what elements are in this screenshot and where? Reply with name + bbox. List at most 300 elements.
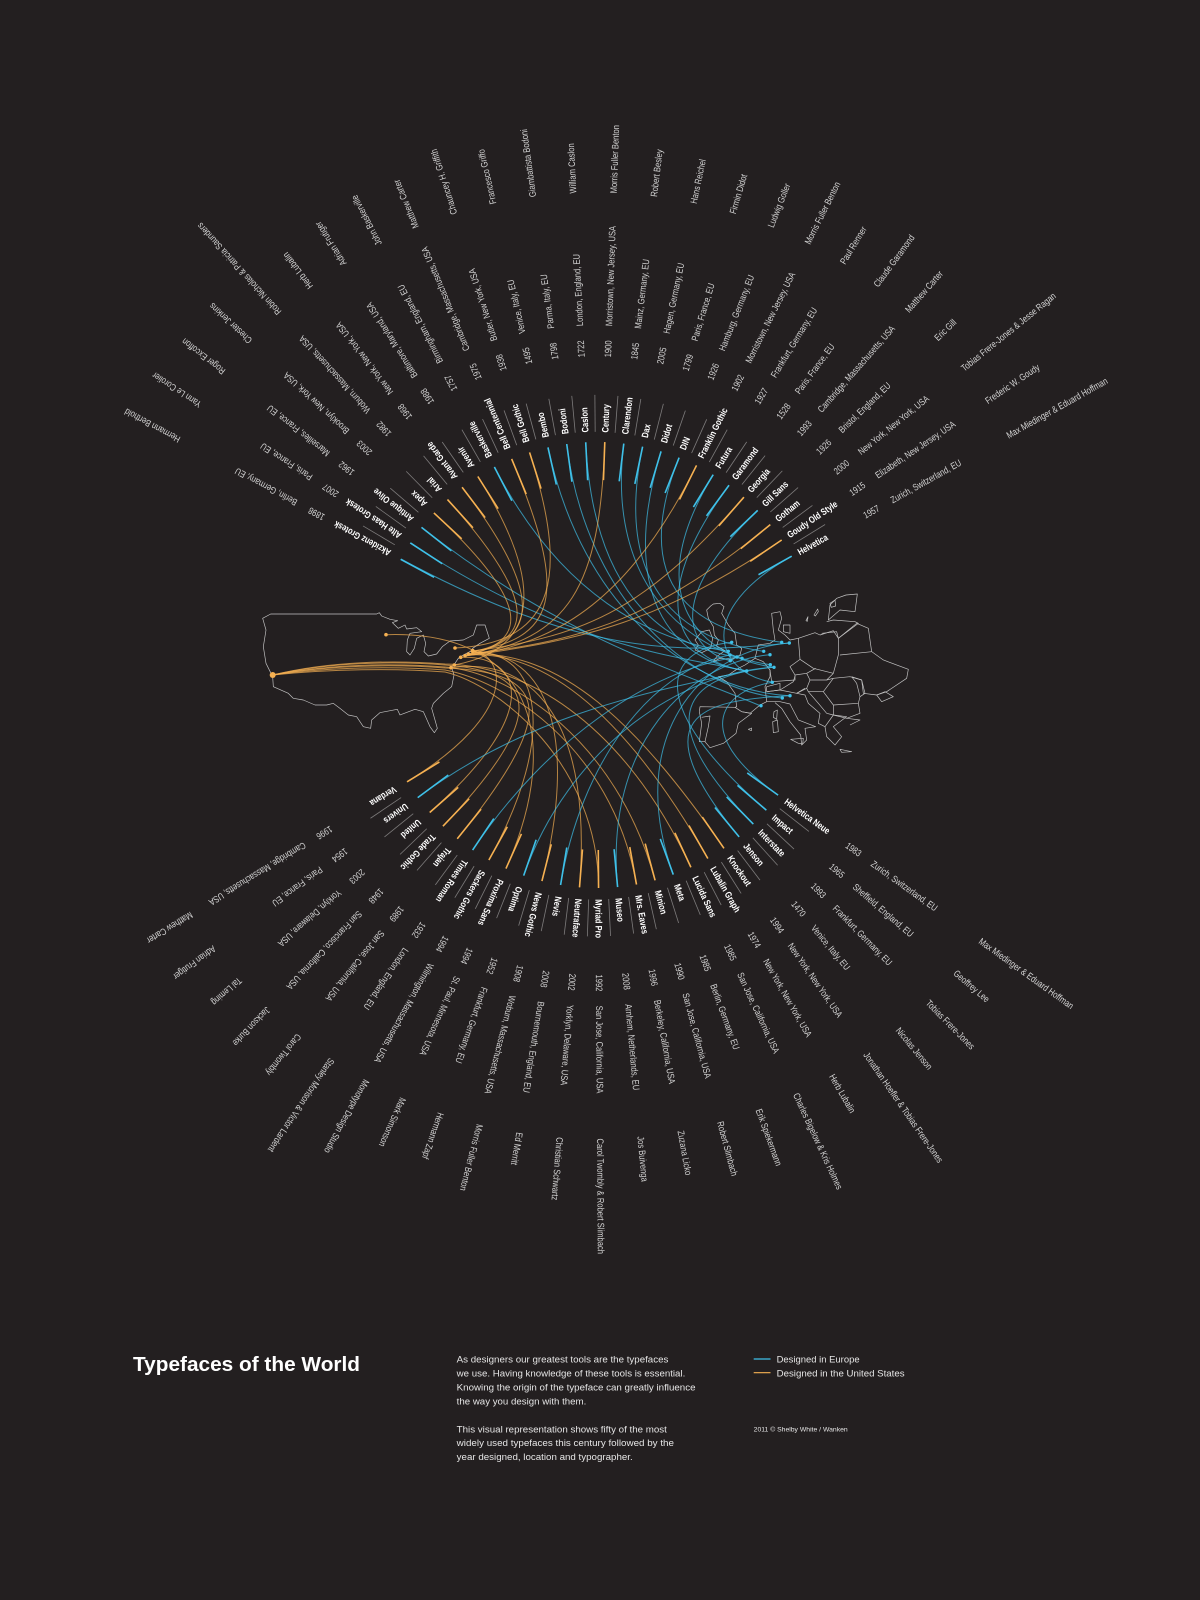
year: 1952 <box>484 956 500 976</box>
designer: Roger Excoffon <box>179 336 227 377</box>
year: 2003 <box>354 438 374 458</box>
year: 1470 <box>789 899 808 919</box>
year: 1989 <box>387 904 406 924</box>
location: San Jose, California, USA <box>323 928 387 1004</box>
curve: Apex to Brooklyn <box>434 513 511 655</box>
name: Bell Gothic <box>509 403 532 444</box>
location: Berkeley, California, USA <box>652 999 678 1085</box>
year: 1954 <box>330 846 350 865</box>
curve: Interstate to Frankfurt <box>689 667 774 824</box>
curve: Dax to Hagen <box>635 447 764 651</box>
spoke: Myriad Pro <box>587 899 607 1254</box>
curve: Neutraface to Yorklyn <box>451 666 582 887</box>
designer: Morris Fuller Benton <box>458 1123 485 1192</box>
curve: Antique Olive to Marseilles <box>422 527 761 706</box>
curve: Knockout to New York <box>468 654 724 848</box>
spoke: Dax <box>639 158 714 440</box>
name: Baskerville <box>466 419 494 460</box>
curve: Lubalin Graph to New York <box>468 655 708 859</box>
name: Lucida Sans <box>690 874 719 919</box>
designer: Matthew Carter <box>145 910 195 946</box>
curve: Bell Gothic to Butler <box>455 452 550 648</box>
spoke: Arial <box>195 217 448 495</box>
designer: Chauncey H. Griffith <box>428 147 459 216</box>
name: Century <box>600 404 612 433</box>
curve: Century to Morristown <box>464 442 605 656</box>
spoke: Interstate <box>752 827 977 1056</box>
curve: Bembo to Venice <box>548 447 790 696</box>
curve: Trade Gothic to San Francisco <box>273 663 519 826</box>
name: Dax <box>639 423 653 439</box>
year: 1965 <box>827 861 847 880</box>
name: Bodoni <box>556 408 571 435</box>
curve: Verdana to Cambridge <box>407 651 496 782</box>
name: United <box>399 817 423 841</box>
spoke: Akzidenz Grotesk <box>122 401 396 558</box>
name: Meta <box>672 882 688 903</box>
designer: Giambattista Bodoni <box>518 129 538 198</box>
curve: Gill Sans to Bristol <box>693 510 758 661</box>
location: New York, New York, USA <box>856 393 931 457</box>
location: Elizabeth, New Jersey, USA <box>873 418 958 481</box>
name: Knockout <box>725 853 754 888</box>
location: St. Paul, Minnesota, USA <box>417 975 463 1058</box>
curve: Avant Garde to New York <box>462 487 522 654</box>
spoke: Impact <box>766 812 992 1009</box>
designer: Charles Bigelow & Kris Holmes <box>791 1091 845 1191</box>
designer: Jos Buivenga <box>635 1136 650 1182</box>
designer: Jackson Burke <box>230 1005 273 1049</box>
connection curves <box>273 442 792 888</box>
location: Bournemouth, England, EU <box>521 1001 547 1094</box>
location: Frankfurt, Germany, EU <box>831 903 895 968</box>
year: 1993 <box>809 881 829 901</box>
year: 2007 <box>320 481 341 500</box>
curve: Sackers Gothic to Wilmington <box>472 652 533 860</box>
spoke: Verdana <box>145 784 399 946</box>
designer: Max Miedinger & Eduard Hoffman <box>1004 375 1110 441</box>
spoke: Century <box>600 125 627 433</box>
name: Helvetica Neue <box>782 796 832 836</box>
spoke: Nevis <box>503 895 564 1166</box>
spoke: Avenir <box>313 216 482 470</box>
spoke: Optima <box>414 883 525 1161</box>
designer: Tobias Frere-Jones <box>924 998 977 1052</box>
location: Venice, Italy, EU <box>505 279 528 335</box>
copyright: 2011 © Shelby White / Wanken <box>754 1425 848 1433</box>
description text: year designed, location and typographer. <box>457 1452 633 1463</box>
description text: As designers our greatest tools are the typefaces <box>457 1355 669 1366</box>
location: Brooklyn, New York, USA <box>281 370 351 436</box>
spoke: Futura <box>713 224 874 473</box>
spoke: Alte Haas Grotesk <box>150 365 407 541</box>
curve: Helvetica to Zurich <box>724 556 792 682</box>
location: Zurich, Switzerland, EU <box>869 858 940 913</box>
year: 1798 <box>547 342 561 360</box>
location: Parma, Italy, EU <box>538 274 556 329</box>
curve: Futura to Frankfurt <box>679 475 774 667</box>
curve: Garamond to Paris <box>678 485 747 671</box>
name: Bembo <box>535 411 551 439</box>
year: 1996 <box>314 824 335 842</box>
curve: Arial to Woburn <box>447 500 517 652</box>
name: Antique Olive <box>371 486 416 524</box>
name: Arial <box>424 475 444 495</box>
location: London, England, EU <box>571 254 585 326</box>
curve: Clarendon to Mainz <box>619 444 770 665</box>
designer: Christian Schwartz <box>549 1137 565 1201</box>
location: Arnhem, Netherlands, EU <box>623 1004 642 1091</box>
year: 1900 <box>602 340 614 357</box>
name: Myriad Pro <box>593 899 604 938</box>
spoke: Neutraface <box>543 898 584 1201</box>
location: Wilmington, Massachusetts, USA <box>372 961 436 1065</box>
name: Proxima Sans <box>476 878 506 928</box>
location: New York, New York, USA <box>761 957 814 1039</box>
location: Cambridge, Massachusetts, USA <box>207 840 308 908</box>
spoke: Bell Centennial <box>391 176 518 451</box>
year: 1927 <box>752 386 770 406</box>
designer: Robin Nicholas & Patricia Saunders <box>195 221 284 317</box>
spoke: Bodoni <box>518 128 577 435</box>
name: Interstate <box>756 827 788 859</box>
designer: Hermann Zapf <box>420 1111 446 1161</box>
location: San Jose, California, USA <box>735 971 782 1055</box>
curve: News Gothic to Woburn <box>471 652 557 881</box>
designer: William Caslon <box>565 143 579 194</box>
spoke: Georgia <box>745 268 950 499</box>
location: Yorklyn, Delaware, USA <box>276 887 344 949</box>
name: Sackers Gothic <box>451 868 488 922</box>
year: 1757 <box>442 373 460 393</box>
name: Neutraface <box>570 898 584 938</box>
location: Paris, France, EU <box>258 441 314 483</box>
year: 1898 <box>306 505 326 523</box>
spoke: Lucida Sans <box>685 874 845 1194</box>
year: 2005 <box>654 346 669 365</box>
radial labels <box>122 125 1110 1254</box>
spoke: Times Roman <box>260 854 470 1155</box>
designer: Claude Garamond <box>871 232 917 289</box>
designer: Tal Leming <box>209 975 244 1008</box>
name: Trade Gothic <box>398 832 438 873</box>
designer: Carol Twombly & Robert Slimbach <box>595 1138 607 1254</box>
designer: Adrian Frutiger <box>171 943 218 982</box>
location: Butler, New York, USA <box>466 267 499 343</box>
description text: we use. Having knowledge of these tools is essential. <box>456 1369 685 1380</box>
name: Didot <box>658 423 675 444</box>
spoke: Baskerville <box>349 190 500 460</box>
name: Helvetica <box>796 531 830 557</box>
designer: Morris Fuller Benton <box>608 125 621 194</box>
location: London, England, EU <box>361 946 411 1012</box>
curve: Optima to Frankfurt <box>524 667 774 876</box>
curve: Lucida Sans to San Jose <box>273 662 691 867</box>
spoke: Antique Olive <box>179 331 419 524</box>
spoke: Trajan <box>259 842 454 1078</box>
spoke: United <box>205 813 423 1008</box>
designer: Matthew Carter <box>391 178 421 230</box>
designer: Stanley Morison & Victor Lardent <box>265 1056 337 1155</box>
name: Avenir <box>455 444 477 470</box>
name: Futura <box>713 444 735 470</box>
year: 2000 <box>831 457 852 477</box>
designer: Chester Jenkins <box>207 301 254 346</box>
spoke: Proxima Sans <box>371 875 506 1149</box>
curve: Didot to Paris <box>645 451 747 671</box>
curve: Myriad Pro to San Jose <box>273 670 599 888</box>
spoke: Knockout <box>720 853 945 1168</box>
spoke: Helvetica Neue <box>779 796 1076 1016</box>
designer: Eric Gill <box>932 317 959 343</box>
year: 1974 <box>745 930 764 950</box>
curve: Univers to Paris <box>418 671 747 798</box>
spoke: Goudy Old Style <box>785 361 1045 545</box>
description text: widely used typefaces this century followed by the <box>456 1438 674 1449</box>
curve: Georgia to Cambridge <box>473 497 744 651</box>
curve: Bodoni to Parma <box>567 444 782 698</box>
curve: Avenir to Baltimore <box>454 476 524 665</box>
location: San Jose, California, USA <box>680 992 714 1080</box>
description text <box>456 1355 696 1463</box>
location: Berlin, Germany, EU <box>708 982 742 1051</box>
year: 1992 <box>594 974 605 992</box>
designer: Ed Merritt <box>509 1132 525 1166</box>
name: Trajan <box>431 845 453 870</box>
year: 1962 <box>336 459 356 478</box>
designer: Ludwig Goller <box>765 182 793 229</box>
location: Marseilles, France, EU <box>265 403 332 459</box>
name: Caslon <box>578 407 591 433</box>
curve: United to Yorklyn <box>430 657 511 812</box>
curve: Minion to San Jose <box>273 665 655 880</box>
curve: Proxima Sans to St. Paul <box>386 635 533 869</box>
year: 1948 <box>366 886 386 906</box>
location: Bristol, England, EU <box>836 380 893 435</box>
city dots: United States <box>270 633 475 678</box>
year: 1994 <box>433 934 451 954</box>
location: Morristown, New Jersey, USA <box>743 270 798 365</box>
location: Paris, France, EU <box>689 282 717 342</box>
location: Paris, France, EU <box>270 864 325 909</box>
location: Sheffield, England, EU <box>851 881 916 939</box>
location: San Jose, California, USA <box>594 1006 606 1094</box>
designer: Herb Lubalin <box>280 250 315 291</box>
spoke: Meta <box>666 882 784 1170</box>
designer: Robert Slimbach <box>715 1120 740 1177</box>
designer: Monotype Design Studio <box>322 1078 372 1155</box>
legend: United States: Designed in the United States <box>777 1368 905 1380</box>
location: Woburn, Massachusetts, USA <box>296 333 373 416</box>
name: Bell Centennial <box>482 397 513 451</box>
curve: Trajan to San Jose <box>273 666 529 839</box>
spoke: Franklin Gothic <box>695 180 848 463</box>
curve: Akzidenz Grotesk to Berlin <box>401 559 789 648</box>
spoke: Apex <box>207 296 433 509</box>
year: 1722 <box>575 340 587 358</box>
spoke: Mrs. Eaves <box>627 894 694 1177</box>
curve: Goudy Old Style to Elizabeth <box>465 540 782 656</box>
designer: Adrian Frutiger <box>313 219 349 268</box>
spoke: Helvetica <box>796 375 1110 557</box>
designer: John Baskerville <box>349 193 384 247</box>
designer: Hermann Berthold <box>122 406 182 445</box>
year: 1799 <box>680 353 695 372</box>
spoke: Bembo <box>475 147 557 439</box>
name: Minion <box>653 889 670 915</box>
description text: Knowing the origin of the typeface can greatly influence <box>457 1382 696 1394</box>
curve: Times Roman to London <box>473 657 737 850</box>
location: Baltimore, Maryland, USA <box>364 300 420 380</box>
year: 1985 <box>722 942 739 963</box>
spoke: Museo <box>607 898 650 1183</box>
name: Georgia <box>745 466 772 495</box>
spoke: Didot <box>658 172 755 446</box>
year: 1908 <box>511 964 526 983</box>
curve: Impact to Sheffield <box>677 642 766 810</box>
name: DIN <box>677 435 692 451</box>
location: New York, New York, USA <box>333 320 395 397</box>
year: 1902 <box>729 373 746 393</box>
curve: Jenson to Venice <box>688 696 790 837</box>
curve: DIN to Hamburg <box>661 458 782 642</box>
name: Akzidenz Grotesk <box>332 519 393 558</box>
designer: Zuzana Licko <box>675 1130 694 1176</box>
name: Gotham <box>773 497 802 524</box>
name: News Gothic <box>522 891 544 938</box>
year: 2003 <box>347 867 367 886</box>
spoke: Univers <box>167 796 410 982</box>
name: Mrs. Eaves <box>633 894 651 935</box>
spoke: Garamond <box>729 232 922 485</box>
name: Apex <box>408 488 429 509</box>
year: 1957 <box>861 503 882 521</box>
name: Optima <box>506 885 525 913</box>
name: Clarendon <box>619 397 635 435</box>
name: Franklin Gothic <box>695 406 730 460</box>
map: United States outline <box>263 613 489 733</box>
designer: Francesco Griffo <box>475 148 498 205</box>
designer: Herb Lubalin <box>827 1072 858 1115</box>
location: New York, New York, USA <box>786 941 845 1020</box>
year: 1915 <box>847 479 868 498</box>
year: 1982 <box>374 419 393 439</box>
designer: Mark Simonson <box>377 1096 408 1149</box>
year: 1975 <box>467 362 484 382</box>
year: 1993 <box>795 418 814 438</box>
spoke: News Gothic <box>452 890 544 1192</box>
spoke: Caslon <box>565 143 597 433</box>
curve: Gotham to New York <box>468 525 770 654</box>
name: Lubalin Graph <box>708 865 743 914</box>
name: Impact <box>770 812 796 836</box>
year: 1968 <box>395 402 414 422</box>
year: 1932 <box>409 920 428 940</box>
name: Univers <box>381 801 410 827</box>
name: Avant Garde <box>424 440 460 482</box>
year: 1938 <box>493 353 509 372</box>
spoke: Trade Gothic <box>226 828 438 1049</box>
name: Verdana <box>368 784 399 809</box>
year: 1926 <box>814 437 834 457</box>
year: 1988 <box>418 386 436 407</box>
location: Cambridge, Massachusetts, USA <box>419 245 472 353</box>
designer: Erik Spiekermann <box>753 1107 784 1167</box>
location: Birmingham, England, EU <box>395 283 445 365</box>
designer: Paul Renner <box>838 224 869 266</box>
curve: Museo to Arnhem <box>614 655 770 887</box>
curve: Franklin Gothic to Morristown <box>464 465 697 656</box>
designer: Nicolas Jenson <box>894 1025 935 1072</box>
spoke: Jenson <box>736 841 935 1076</box>
location: Hagen, Germany, EU <box>661 262 686 335</box>
year: 1983 <box>844 840 864 859</box>
location: Frankfurt, Germany, EU <box>768 305 819 379</box>
spoke: Avant Garde <box>280 246 465 482</box>
location: Hamburg, Germany, EU <box>716 273 756 352</box>
city dots: Europe <box>727 641 792 707</box>
name: Nevis <box>550 896 564 917</box>
legend: Europe: Designed in Europe <box>777 1355 860 1366</box>
location: Mainz, Germany, EU <box>632 258 652 329</box>
description text: This visual representation shows fifty of the most <box>457 1424 667 1435</box>
designer: Carol Twombly <box>263 1032 304 1078</box>
year: 2002 <box>566 973 578 991</box>
spoke: Minion <box>647 889 740 1179</box>
description text: the way you design with them. <box>457 1396 586 1407</box>
name: Gill Sans <box>760 478 791 509</box>
location: Paris, France, EU <box>792 341 837 396</box>
map: Europe outlines <box>695 594 908 752</box>
name: Museo <box>613 898 626 922</box>
designer: Jonathan Hoefler & Tobias Frere-Jones <box>861 1050 945 1165</box>
year: 2008 <box>620 972 633 990</box>
designer: Max Miedinger & Eduard Hoffman <box>977 936 1076 1011</box>
location: Venice, Italy, EU <box>809 923 853 972</box>
legend <box>754 1355 905 1380</box>
name: Goudy Old Style <box>785 498 840 540</box>
designer: Robert Besley <box>648 148 665 197</box>
spoke: Gotham <box>773 290 1062 529</box>
year: 1926 <box>705 362 721 381</box>
spoke: DIN <box>677 182 798 454</box>
location: Morristown, New Jersey, USA <box>603 225 618 326</box>
year: 1528 <box>774 401 793 421</box>
curve: Mrs. Eaves to Berkeley <box>273 668 636 884</box>
spoke: Clarendon <box>619 148 671 436</box>
year: 1985 <box>697 953 714 973</box>
spoke: Lubalin Graph <box>703 865 858 1118</box>
year: 1495 <box>520 346 535 365</box>
curve: Helvetica Neue to Zurich <box>723 682 778 795</box>
designer: Tobias Frere-Jones & Jesse Ragan <box>959 290 1058 373</box>
designer: Frederic W. Goudy <box>983 361 1042 406</box>
spoke: Gill Sans <box>760 317 963 513</box>
year: 1994 <box>458 946 475 966</box>
location: Frankfurt, Germany, EU <box>453 986 490 1065</box>
spoke: Bell Gothic <box>428 146 537 444</box>
curve: Alte Haas Grotesk to Paris <box>410 543 747 671</box>
designer: Hans Reichel <box>688 158 708 205</box>
curve: Bell Centennial to Cambridge <box>473 459 547 651</box>
spoke: Sackers Gothic <box>317 865 488 1155</box>
designer: Yann Le Corolier <box>150 370 203 410</box>
title: Typefaces of the World <box>133 1353 360 1376</box>
location: Berlin, Germany, EU <box>233 466 299 508</box>
name: Garamond <box>729 445 761 482</box>
name: Alte Haas Grotesk <box>343 496 403 541</box>
designer: Firmin Didot <box>727 172 750 215</box>
